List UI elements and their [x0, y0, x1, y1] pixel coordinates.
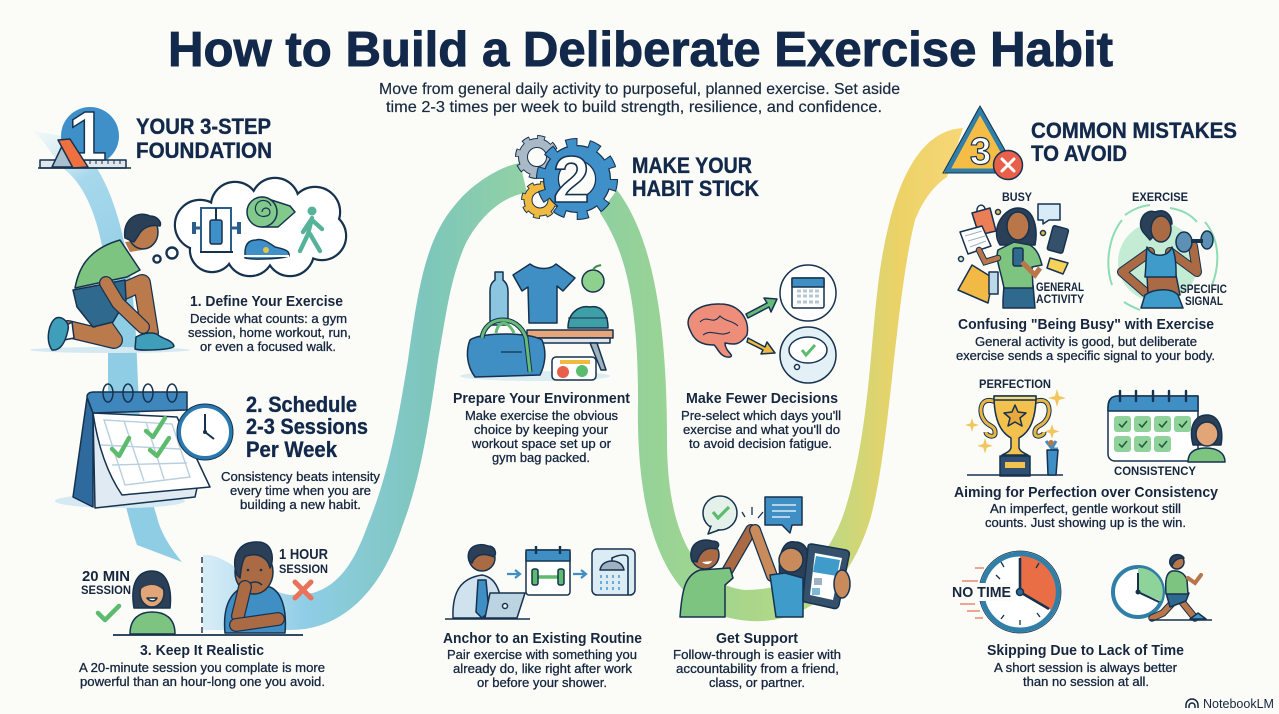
illustration: exercising woman, specific signal [1108, 190, 1227, 310]
illustration: busy woman, general activity: GENERAL [1036, 280, 1084, 294]
text: define your exercise [188, 293, 351, 354]
text: anchor to an existing routine: Pair exercise with something you [447, 647, 637, 662]
subtitle [379, 81, 900, 116]
thought cloud with exercise icons [153, 178, 346, 276]
illustration: busy woman, general activity: ACTIVITY [1036, 292, 1084, 306]
text: get support [673, 630, 841, 690]
heading: your 3-step foundation: YOUR 3-STEP [136, 114, 271, 139]
illustration: busy woman, general activity [958, 190, 1084, 308]
text: schedule 2-3 sessions [221, 392, 380, 512]
text: keep it realistic: powerful than an hour-long one you avoid. [80, 674, 325, 689]
text: skipping due to lack of time: A short session is always better [994, 660, 1178, 675]
text: prepare your environment: Prepare Your Environment [453, 390, 630, 407]
panel: common mistakes to avoid [943, 106, 1237, 689]
icon: number 1 starting block [38, 97, 131, 175]
illustration: consistency calendar [1108, 391, 1225, 478]
text: confusing being busy with exercise: General activity is good, but deliberate [975, 334, 1197, 349]
heading: common mistakes to avoid [1031, 118, 1237, 166]
icon: calendar and clock [55, 384, 233, 508]
illustration: trophy for perfection: PERFECTION [979, 377, 1051, 391]
illustration: 20 minute vs 1 hour session: 1 HOUR [279, 546, 328, 563]
illustration: friends high five with phone [680, 496, 850, 617]
illustration: exercising woman, specific signal: EXERCISE [1132, 190, 1188, 204]
heading: your 3-step foundation [136, 114, 272, 163]
flowing ribbon path [30, 128, 963, 630]
illustration: gym bag, shirt and bench [460, 264, 613, 381]
title: How to Build a Deliberate Exercise Habit [168, 23, 1113, 77]
text: get support: Get Support [716, 630, 798, 647]
heading: common mistakes to avoid: TO AVOID [1031, 141, 1127, 166]
illustration: 20 minute vs 1 hour session: 20 MIN [82, 568, 130, 585]
text: schedule 2-3 sessions: 2. Schedule [246, 392, 357, 417]
illustration: exercising woman, specific signal: SIGNAL [1185, 294, 1223, 308]
heading: your 3-step foundation: FOUNDATION [136, 138, 272, 163]
text: prepare your environment [453, 390, 630, 465]
text: anchor to an existing routine: or before your shower. [477, 675, 607, 690]
text: confusing being busy with exercise: exercise sends a specific signal to your body. [956, 348, 1215, 363]
illustration: trophy for perfection [965, 377, 1066, 476]
heading: make your habit stick [632, 153, 759, 201]
text: confusing being busy with exercise: Confusing "Being Busy" with Exercise [958, 316, 1214, 333]
illustration: 20 minute vs 1 hour session [81, 542, 328, 635]
text: get support: class, or partner. [709, 675, 805, 690]
text: anchor to an existing routine: Anchor to an Existing Routine [443, 630, 642, 647]
illustration: consistency calendar: CONSISTENCY [1114, 464, 1196, 478]
illustration: 20 minute vs 1 hour session: SESSION [279, 562, 328, 576]
text: schedule 2-3 sessions: Per Week [246, 437, 338, 462]
illustration: no time clock [951, 551, 1061, 633]
text: prepare your environment: choice by keeping your [474, 422, 609, 437]
text: confusing being busy with exercise [956, 316, 1215, 363]
icon: number 2 gears: 2 [553, 142, 590, 216]
text: schedule 2-3 sessions: Consistency beats intensity [221, 469, 380, 484]
text: skipping due to lack of time [987, 642, 1184, 689]
icon: number 2 gears [518, 138, 613, 216]
subtitle: time 2-3 times per week to build strength, resilience, and confidence. [386, 99, 882, 116]
illustration: exercising woman, specific signal: SPECIFIC [1180, 282, 1227, 296]
subtitle: Move from general daily activity to purposeful, planned exercise. Set aside [379, 81, 900, 98]
icon: warning triangle with number 3 [943, 106, 1022, 180]
text: define your exercise: 1. Define Your Exercise [190, 293, 343, 310]
heading: make your habit stick: MAKE YOUR [632, 153, 752, 178]
illustration: 20 minute vs 1 hour session: SESSION [81, 583, 131, 597]
icon: number 1 starting block: 1 [68, 97, 107, 175]
text: aiming for perfection over consistency: counts. Just showing up is the win. [985, 515, 1186, 530]
text: aiming for perfection over consistency [954, 484, 1219, 530]
text: make fewer decisions: exercise and what you'll do [683, 422, 840, 437]
text: define your exercise: or even a focused walk. [200, 339, 336, 354]
text: prepare your environment: gym bag packed. [492, 450, 590, 465]
text: schedule 2-3 sessions: every time when you are [230, 483, 371, 498]
illustration: no time clock: NO TIME [952, 584, 1011, 601]
text: prepare your environment: Make exercise the obvious [465, 408, 618, 423]
illustration: brain choosing plan [688, 265, 836, 383]
text: anchor to an existing routine [443, 630, 642, 690]
panel: your 3-step foundation [30, 97, 380, 689]
heading: make your habit stick: HABIT STICK [632, 176, 759, 201]
text: define your exercise: session, home workout, run, [188, 325, 351, 340]
text: prepare your environment: workout space set up or [471, 436, 612, 451]
illustration: runner passing a clock [1113, 555, 1212, 620]
text: schedule 2-3 sessions: 2-3 Sessions [246, 414, 368, 439]
text: aiming for perfection over consistency: An imperfect, gentle workout still [990, 501, 1181, 516]
illustration: routine from work to gym to shower [445, 545, 635, 619]
heading: common mistakes to avoid: COMMON MISTAKES [1031, 118, 1237, 143]
text: skipping due to lack of time: than no session at all. [1023, 674, 1149, 689]
text: keep it realistic: A 20-minute session you complate is more [79, 660, 325, 675]
text: aiming for perfection over consistency: Aiming for Perfection over Consistency [954, 484, 1219, 501]
text: make fewer decisions: to avoid decision fatigue. [689, 436, 832, 451]
text: define your exercise: Decide what counts: a gym [190, 311, 347, 326]
text: get support: accountability from a friend, [676, 661, 839, 676]
icon: warning triangle with number 3: 3 [970, 131, 991, 173]
text: anchor to an existing routine: already do, like right after work [453, 661, 632, 676]
text: make fewer decisions [681, 390, 841, 451]
illustration: busy woman, general activity: BUSY [1002, 190, 1032, 204]
text: keep it realistic: 3. Keep It Realistic [140, 642, 264, 659]
text: schedule 2-3 sessions: building a new habit. [240, 497, 361, 512]
text: skipping due to lack of time: Skipping Due to Lack of Time [987, 642, 1184, 659]
text: get support: Follow-through is easier with [673, 647, 841, 662]
illustration: man tying his shoe [30, 214, 190, 353]
text: make fewer decisions: Pre-select which days you'll [681, 408, 841, 423]
panel: make your habit stick [443, 138, 850, 690]
text: keep it realistic [79, 642, 325, 689]
notebooklm watermark: NotebookLM [1203, 696, 1274, 711]
text: make fewer decisions: Make Fewer Decisions [686, 390, 838, 407]
